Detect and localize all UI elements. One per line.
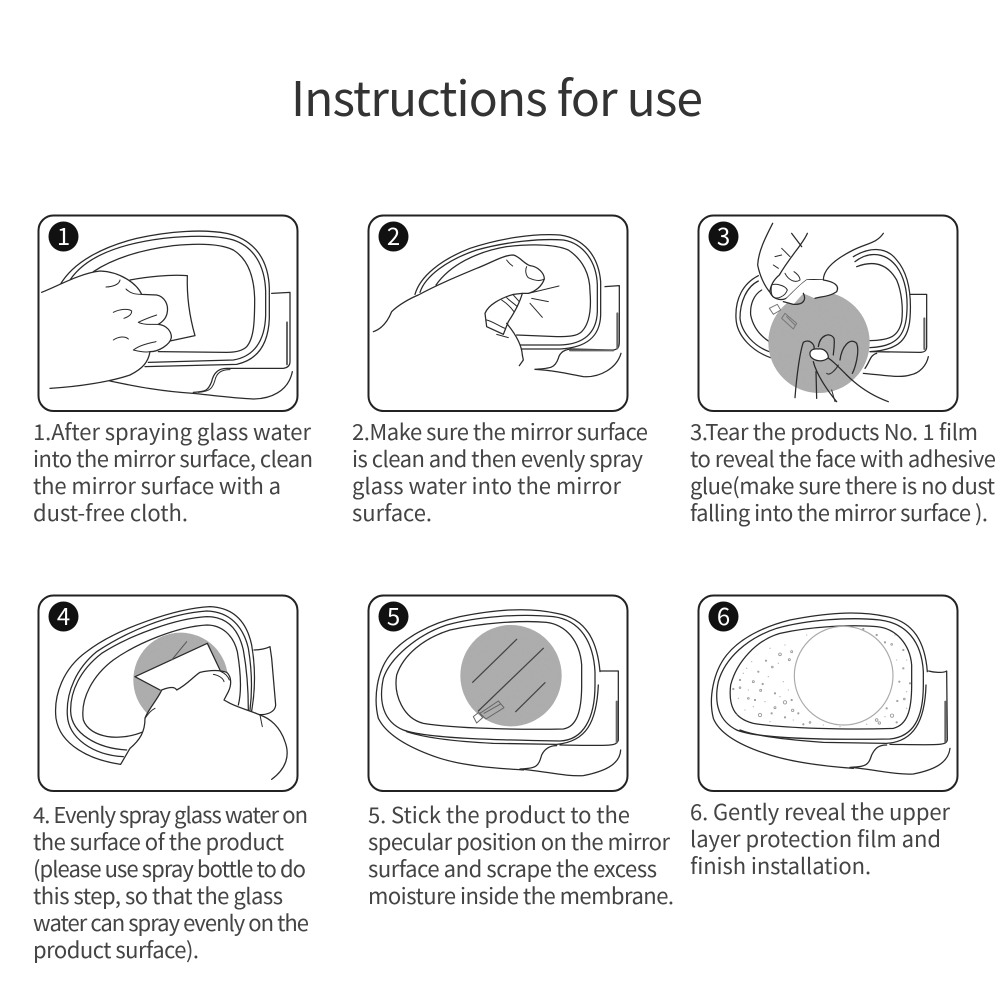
text block: step 2: 2.Make sure the mirror surface bbox=[352, 415, 648, 447]
step 6 number badge: 6 bbox=[717, 597, 730, 632]
panel: step 4 bbox=[38, 596, 298, 791]
step 2 illustration: hand spraying mirror bbox=[373, 235, 621, 405]
step 3 number badge bbox=[708, 217, 738, 252]
droplets on the mirror glass bbox=[733, 628, 911, 725]
text block: step 2 bbox=[352, 415, 648, 528]
text block: step 1: into the mirror surface, clean bbox=[33, 442, 313, 474]
text block: step 1 bbox=[33, 415, 313, 528]
step 3 illustration: tearing film from the round product bbox=[736, 223, 928, 402]
text block: step 4: 4. Evenly spray glass water on bbox=[33, 798, 308, 830]
panel: step 3 bbox=[698, 216, 958, 411]
text block: step 2: glass water into the mirror bbox=[352, 469, 621, 501]
step 2 frame bbox=[368, 216, 628, 411]
panel: step 6 bbox=[698, 596, 958, 791]
text block: step 4 bbox=[33, 798, 309, 965]
step 6 frame bbox=[698, 596, 958, 791]
step 5 number badge bbox=[378, 597, 408, 632]
step 3 frame bbox=[698, 216, 958, 411]
text block: step 5 bbox=[368, 798, 674, 911]
step 4 number badge: 4 bbox=[57, 597, 70, 632]
faint specks on the mirror glass bbox=[736, 628, 907, 727]
text block: step 3: glue(make sure there is no dust bbox=[690, 469, 995, 501]
step 3 number badge: 3 bbox=[717, 217, 730, 252]
text block: step 4: (please use spray bottle to do bbox=[33, 852, 306, 884]
text block: step 3: to reveal the face with adhesive bbox=[690, 442, 996, 474]
text block: step 3: 3.Tear the products No. 1 film bbox=[690, 415, 978, 447]
text block: step 4: product surface). bbox=[33, 933, 199, 965]
step 1 frame bbox=[38, 216, 298, 411]
step 5 illustration: product stuck on mirror bbox=[376, 610, 621, 776]
step 1 number badge bbox=[48, 217, 78, 252]
text block: step 4: the surface of the product bbox=[33, 825, 284, 857]
title: Instructions for use bbox=[291, 60, 703, 130]
panel: step 5 bbox=[368, 596, 628, 791]
panel: step 1 bbox=[38, 216, 298, 411]
text block: step 2: is clean and then evenly spray bbox=[352, 442, 644, 474]
text block: step 1: the mirror surface with a bbox=[33, 469, 281, 501]
text block: step 6: 6. Gently reveal the upper bbox=[690, 795, 950, 827]
text block: step 1: dust-free cloth. bbox=[33, 496, 188, 528]
step 5 frame bbox=[368, 596, 628, 791]
text block: step 2: surface. bbox=[352, 496, 432, 528]
text block: step 6: finish installation. bbox=[690, 849, 871, 881]
text block: step 5: specular position on the mirror bbox=[368, 825, 670, 857]
step 4 illustration: spraying and smoothing the product bbox=[56, 607, 287, 785]
text block: step 5: moisture inside the membrane. bbox=[368, 879, 674, 911]
text block: step 4: this step, so that the glass bbox=[33, 879, 283, 911]
text block: step 3: falling into the mirror surface ). bbox=[690, 496, 988, 528]
step 5 number badge: 5 bbox=[387, 597, 400, 632]
text block: step 3 bbox=[690, 415, 996, 528]
step 4 number badge bbox=[48, 597, 78, 632]
step 6 illustration: finished mirror with clear circle and droplets bbox=[711, 613, 950, 774]
text block: step 5: surface and scrape the excess bbox=[368, 852, 657, 884]
text block: step 1: 1.After spraying glass water bbox=[33, 415, 311, 447]
step 1 number badge: 1 bbox=[57, 217, 70, 252]
step 2 number badge: 2 bbox=[387, 217, 400, 252]
panel: step 2 bbox=[368, 216, 628, 411]
step 2 number badge bbox=[378, 217, 408, 252]
step 1 illustration: hand wiping mirror with cloth bbox=[42, 231, 292, 399]
text block: step 4: water can spray evenly on the bbox=[33, 906, 309, 938]
text block: step 5: 5. Stick the product to the bbox=[368, 798, 630, 830]
step 4 frame bbox=[38, 596, 298, 791]
text block: step 6 bbox=[690, 795, 950, 881]
text block: step 6: layer protection film and bbox=[690, 822, 941, 854]
step 6 number badge bbox=[708, 597, 738, 632]
